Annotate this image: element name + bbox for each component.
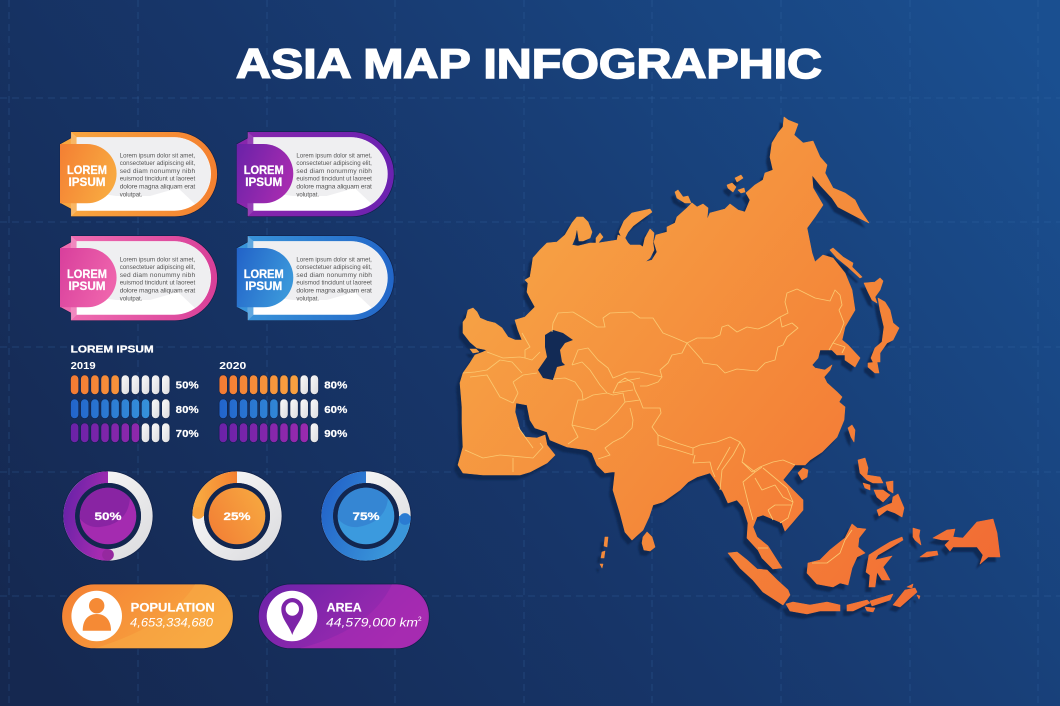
stat pill: population: 4,653,334,680 (130, 618, 214, 630)
bar chart: 2019 (70, 360, 199, 442)
map shadow (454, 122, 996, 619)
donut chart: 25%: 25% (224, 511, 251, 523)
card text: consectetuer adipiscing elit, (296, 264, 372, 271)
card text: euismod tincidunt ut laoreet (296, 280, 372, 287)
panel: orange info card (60, 132, 218, 217)
percent labels: 60% (324, 404, 348, 416)
card text: sed diam nonummy nibh (296, 168, 372, 175)
donut chart: 25% (192, 470, 282, 562)
card label (244, 269, 284, 293)
card label: LOREM (244, 165, 284, 177)
card text: Lorem ipsum dolor sit amet, (120, 256, 195, 263)
year label: 2019 (71, 360, 96, 372)
donut chart: 75% (320, 470, 412, 562)
card label: IPSUM (68, 177, 106, 189)
card label: IPSUM (245, 281, 282, 293)
card label: LOREM (244, 269, 284, 281)
card text: dolore magna aliquam erat (120, 288, 195, 294)
percent labels: 50% (176, 380, 199, 392)
bar chart: 2020 (219, 360, 348, 442)
card text: consectetuer adipiscing elit, (296, 160, 372, 167)
percent labels (324, 380, 348, 440)
year label: 2020 (219, 360, 246, 372)
donut chart: 50%: 50% (94, 511, 122, 523)
percent labels (176, 380, 199, 440)
heading: bar chart section: LOREM IPSUM (71, 344, 154, 356)
card text: sed diam nonummy nibh (120, 168, 196, 175)
card label: LOREM (67, 269, 107, 281)
card text: Lorem ipsum dolor sit amet, (296, 152, 372, 159)
map land (458, 117, 1000, 614)
card text: Lorem ipsum dolor sit amet, (296, 256, 372, 263)
card text: sed diam nonummy nibh (296, 272, 372, 279)
stat pill: area (258, 584, 429, 649)
card label: IPSUM (68, 281, 106, 293)
card text (120, 256, 196, 302)
stat pill: population (62, 584, 233, 649)
card text: dolore magna aliquam erat (296, 288, 372, 294)
panel: pink info card (60, 236, 218, 321)
card text: volutpat. (296, 191, 319, 198)
card label (67, 269, 107, 293)
card text: Lorem ipsum dolor sit amet, (120, 152, 195, 159)
card label: IPSUM (245, 177, 282, 189)
card text: euismod tincidunt ut laoreet (120, 280, 195, 287)
card text: volutpat. (120, 295, 143, 302)
card text (120, 152, 196, 198)
card label (67, 165, 107, 189)
card text: euismod tincidunt ut laoreet (120, 176, 195, 183)
percent labels: 80% (176, 404, 199, 416)
card text: euismod tincidunt ut laoreet (296, 176, 372, 183)
percent labels: 80% (324, 380, 348, 392)
card label (244, 165, 284, 189)
icon: person (71, 591, 122, 641)
caspian sea (538, 330, 573, 380)
percent labels: 90% (324, 428, 348, 440)
card text: sed diam nonummy nibh (120, 272, 196, 279)
map: Asia (454, 117, 1000, 619)
card text: consectetuer adipiscing elit, (120, 264, 195, 271)
card text (296, 152, 372, 198)
card label: LOREM (67, 165, 107, 177)
stat pill: population: POPULATION (131, 603, 215, 615)
panel: purple info card (237, 132, 394, 217)
stat pill: area: AREA (327, 603, 362, 615)
donut chart: 75%: 75% (352, 511, 380, 523)
card text: dolore magna aliquam erat (120, 184, 195, 190)
card text: volutpat. (120, 191, 143, 198)
icon: location pin (267, 591, 317, 641)
panel: blue info card (237, 236, 394, 321)
card text (296, 256, 372, 302)
card text: dolore magna aliquam erat (296, 184, 372, 190)
card text: consectetuer adipiscing elit, (120, 160, 195, 167)
card text: volutpat. (296, 295, 319, 302)
title: ASIA MAP INFOGRAPHIC (236, 40, 822, 87)
stat pill: area: 44,579,000 km (326, 618, 418, 630)
percent labels: 70% (176, 428, 199, 440)
stat pill: area: 2 (418, 616, 422, 623)
country borders (463, 289, 852, 563)
donut chart: 50% (62, 470, 154, 562)
